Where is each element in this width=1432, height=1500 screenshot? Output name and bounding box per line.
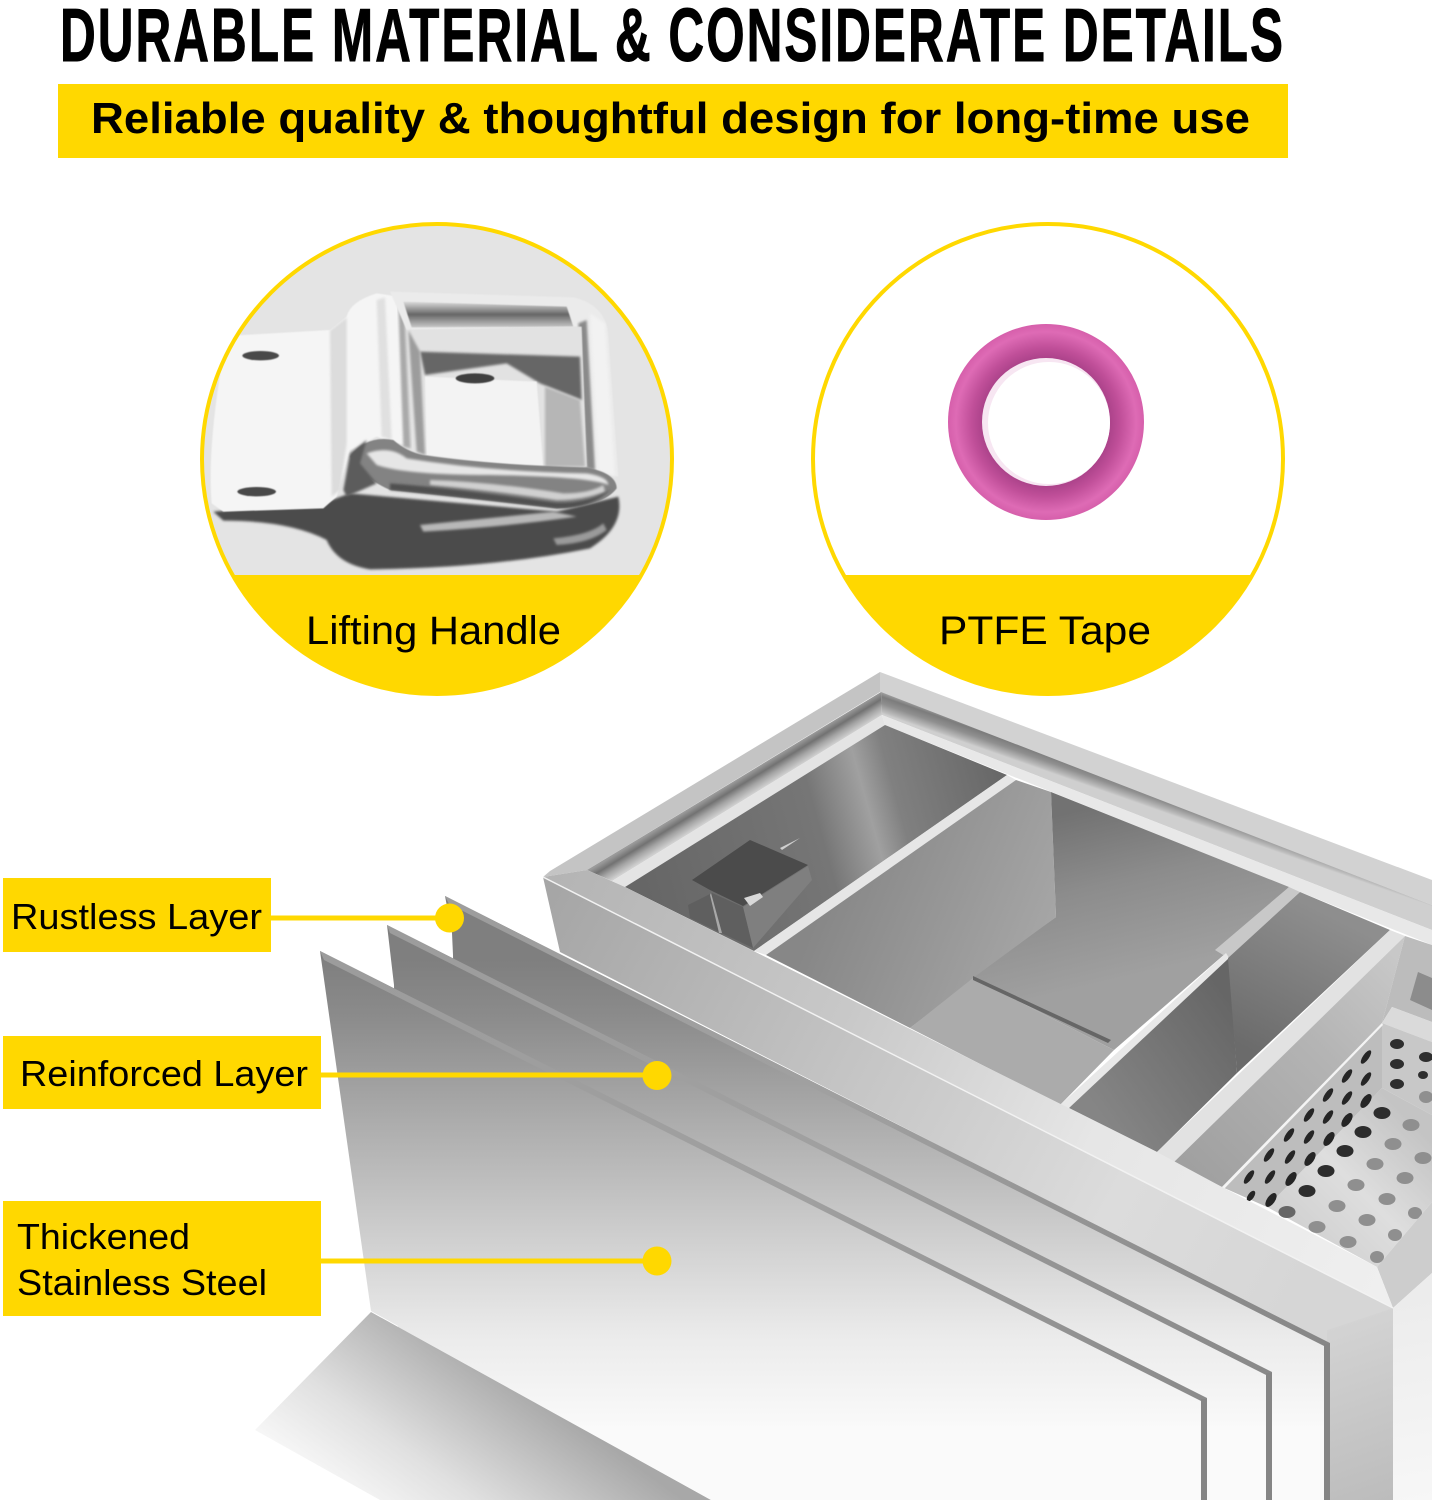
chamber 3 — [1069, 958, 1237, 1152]
perforated basket — [1222, 1023, 1432, 1267]
groove left — [587, 692, 882, 881]
yellow label band — [846, 575, 1250, 692]
frame right rim — [880, 672, 1432, 905]
callout: thickened stainless steel: Thickened — [17, 1216, 190, 1257]
groove right — [881, 692, 1432, 930]
layer panel: reinforced layer — [387, 925, 1272, 1500]
inner reflection — [577, 326, 587, 466]
box side face — [1393, 1273, 1432, 1500]
callout: reinforced layer: Reinforced Layer — [20, 1053, 308, 1094]
subtitle banner: Reliable quality & thoughtful design for long-time use — [91, 94, 1250, 143]
right rim — [1377, 1202, 1432, 1308]
callout: rustless layer — [3, 878, 464, 952]
layer panel: thickened stainless steel — [320, 951, 1207, 1500]
icon: lifting handle photo — [211, 292, 619, 569]
callout: reinforced layer — [3, 1036, 672, 1109]
ring frame — [393, 296, 408, 330]
layer panel: rustless layer — [445, 896, 1330, 1500]
callout circle: lifting handle — [190, 224, 690, 705]
back wall holes — [1390, 1039, 1432, 1089]
basket compartment wall — [1173, 936, 1405, 1187]
chamber 1 — [625, 725, 1007, 951]
partition 2 — [1215, 887, 1300, 958]
partition 3 — [1157, 930, 1405, 1163]
box front face — [543, 877, 1393, 1345]
mounting holes — [242, 351, 279, 360]
front bar of ring — [350, 439, 617, 508]
label: PTFE tape: PTFE Tape — [939, 609, 1151, 653]
subtitle banner — [58, 84, 1288, 158]
front rim top — [543, 870, 1393, 1308]
floor holes dark — [1298, 1107, 1390, 1197]
callout: thickened stainless steel: Stainless Steel — [17, 1262, 267, 1303]
icon: PTFE tape ring — [948, 324, 1144, 520]
yellow label band — [235, 575, 639, 692]
label: lifting handle: Lifting Handle — [306, 609, 561, 653]
partition 1 — [754, 775, 1016, 955]
callout: thickened stainless steel — [3, 1201, 672, 1316]
plate — [211, 293, 410, 512]
floor holes grey — [1308, 1119, 1432, 1263]
shadow — [213, 493, 619, 569]
inlet pipe — [688, 838, 812, 948]
callout: rustless layer: Rustless Layer — [11, 896, 262, 937]
side wall holes — [1242, 1049, 1374, 1209]
middle chamber — [766, 780, 1056, 1028]
callout circle: PTFE tape — [800, 224, 1300, 705]
frame left rim — [543, 672, 880, 877]
shadow under the layers — [255, 1312, 711, 1500]
product illustration: stainless steel grease trap — [543, 672, 1432, 1500]
